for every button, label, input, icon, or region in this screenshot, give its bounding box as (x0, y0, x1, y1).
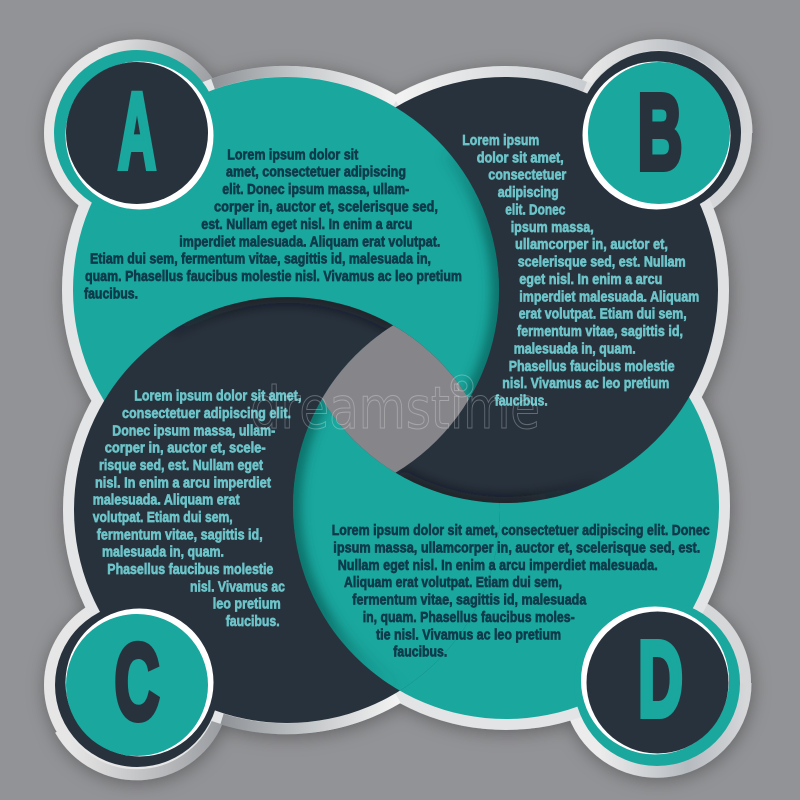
text block B: eget nisl. In enim a arcu (519, 271, 662, 288)
text block B: fermentum vitae, sagittis id, (517, 323, 683, 340)
panel C inner shadow (170, 297, 395, 332)
panel A inner shadow (449, 153, 499, 397)
badge A (54, 50, 220, 216)
text block B: adipiscing (498, 184, 559, 201)
text block C: nisl. Vivamus ac (190, 578, 285, 595)
text block B: elit. Donec (505, 202, 565, 218)
text block D: faucibus. (393, 644, 447, 661)
badge D: D (638, 618, 683, 739)
panel D base (293, 293, 719, 719)
text block A: amet, consectetuer adipiscing (226, 164, 406, 181)
text block B: imperdiet malesuada. Aliquam (519, 288, 699, 305)
panel B base (292, 77, 718, 503)
text block C: Lorem ipsum dolor sit amet, (134, 388, 301, 405)
text block D: Nullam eget nisl. In enim a arcu imperdiet malesuada. (338, 557, 658, 574)
text block A: Lorem ipsum dolor sit (227, 146, 358, 163)
panel D inner shadow (293, 400, 380, 676)
text block C (93, 388, 301, 630)
central grey hole (322, 326, 469, 473)
panel D overlap on C (293, 326, 500, 690)
text block C: leo pretium (213, 596, 281, 613)
text block B: Lorem ipsum (462, 132, 539, 149)
text block A: Etiam dui sem, fermentum vitae, sagittis id, malesuada in, (90, 251, 431, 268)
text block A: quam. Phasellus faucibus molestie nisl. Vivamus ac leo pretium (85, 268, 462, 285)
text block C: volutpat. Etiam dui sem, (93, 509, 233, 526)
text block C: risque sed, est. Nullam eget (99, 457, 263, 474)
text block A: est. Nullam eget nisl. In enim a arcu (201, 216, 412, 233)
text block D: fermentum vitae, sagittis id, malesuada (352, 592, 587, 608)
badge B (577, 51, 741, 215)
seam cover along C edge inside B (473, 407, 500, 503)
text block A: faucibus. (84, 285, 138, 302)
text block C: Phasellus faucibus molestie (107, 561, 273, 578)
interlocking ring: four overlapping circles (73, 77, 719, 723)
text block A (84, 146, 462, 302)
text block D (332, 522, 710, 661)
text block D: ipsum massa, ullamcorper in, auctor et, scelerisque sed, est. (333, 539, 700, 556)
text block A: corper in, auctor et, scelerisque sed, (214, 198, 438, 216)
badge D (574, 600, 740, 766)
text block B: consectetuer (488, 167, 566, 184)
panel A base (73, 77, 499, 503)
text block D: Aliquam erat volutpat. Etiam dui sem, (344, 574, 562, 591)
badge C: C (114, 621, 160, 742)
text block C: nisl. In enim a arcu imperdiet (95, 474, 271, 491)
text block B (462, 132, 699, 410)
watermark: dreamstime (250, 374, 540, 442)
text block C: faucibus. (226, 613, 280, 630)
badge B: B (638, 71, 682, 192)
text block C: consectetuer adipiscing elit. (122, 405, 291, 422)
text block B: ullamcorper in, auctor et, (515, 236, 668, 253)
text block C: fermentum vitae, sagittis id, (97, 526, 263, 543)
text block B: nisl. Vivamus ac leo pretium (502, 375, 669, 392)
badge A: A (118, 70, 156, 191)
panel C base (74, 297, 500, 723)
text block B: ipsum massa, (511, 219, 594, 236)
text block B: Phasellus faucibus molestie (509, 358, 675, 375)
text block B: dolor sit amet, (477, 149, 564, 166)
text block B: scelerisque sed, est. Nullam (518, 254, 686, 271)
text block C: malesuada. Aliquam erat (93, 492, 240, 509)
badge C (55, 603, 219, 767)
text block C: Donec ipsum massa, ullam- (112, 422, 275, 439)
text block B: malesuada in, quam. (514, 340, 636, 357)
text block A: elit. Donec ipsum massa, ullam- (222, 181, 409, 198)
text block D: Lorem ipsum dolor sit amet, consectetuer adipiscing elit. Donec (332, 522, 710, 539)
text block D: in, quam. Phasellus faucibus moles- (363, 609, 575, 626)
text block C: malesuada in, quam. (102, 544, 224, 561)
text block C: corper in, auctor et, scele- (105, 440, 266, 457)
panel B overlap on D (322, 326, 499, 503)
text block B: faucibus. (495, 392, 548, 410)
text block D: tie nisl. Vivamus ac leo pretium (376, 626, 561, 643)
text block A: imperdiet malesuada. Aliquam erat volutpat. (179, 233, 440, 250)
text block B: erat volutpat. Etiam dui sem, (519, 306, 687, 323)
panel B inner shadow (398, 474, 600, 503)
